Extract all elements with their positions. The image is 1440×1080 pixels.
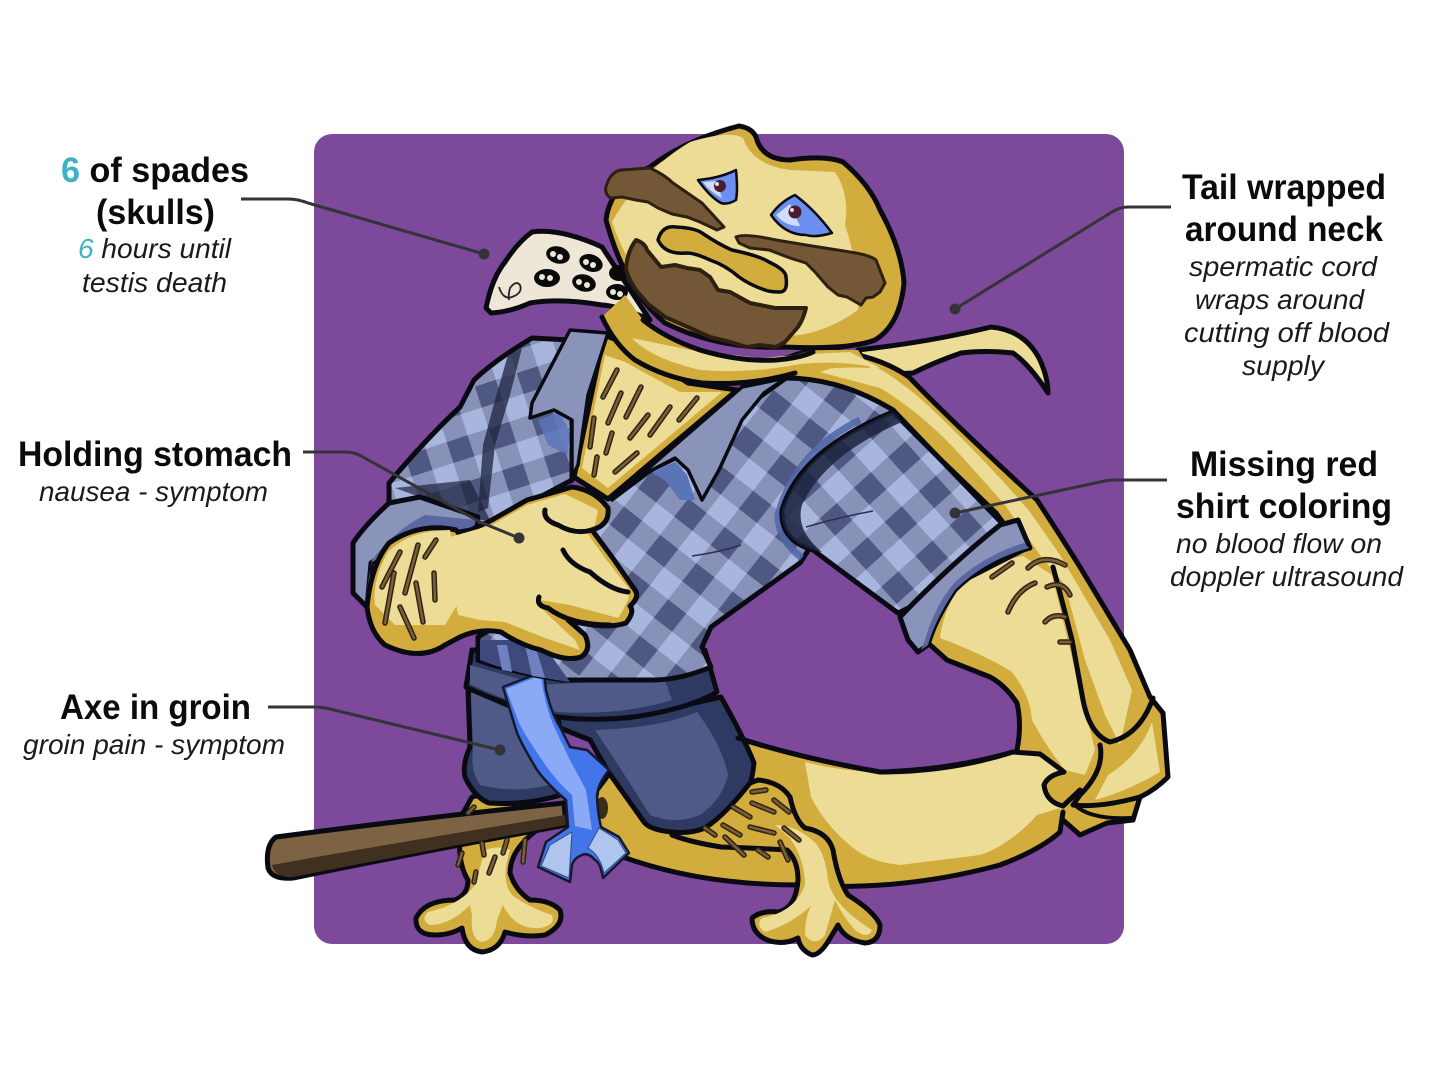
label: tail wrapped around neck: Tail wrapped bbox=[1182, 168, 1386, 207]
left foot and leg bbox=[416, 790, 561, 952]
card skull pips bbox=[534, 244, 629, 300]
stitches on forearm bbox=[992, 560, 1070, 642]
label: 6 of spades: 6 of spades bbox=[61, 151, 249, 190]
leader line: holding stomach bbox=[303, 452, 524, 544]
label: axe in groin: Axe in groin bbox=[60, 688, 251, 727]
axe handle bbox=[267, 803, 566, 878]
wrist hair bbox=[382, 540, 436, 638]
label: missing red shirt coloring bbox=[1170, 445, 1404, 592]
label: axe in groin bbox=[23, 688, 285, 760]
neck wrap of tail bbox=[602, 295, 880, 384]
tail body and right arm bbox=[780, 350, 1168, 835]
left eye bbox=[698, 170, 737, 204]
right shirt cuff bbox=[900, 520, 1030, 652]
right foot and leg bbox=[672, 780, 880, 955]
pants bbox=[464, 650, 754, 832]
right eye bbox=[771, 195, 832, 236]
label: axe in groin: groin pain - symptom bbox=[23, 729, 285, 760]
label: holding stomach: Holding stomach bbox=[18, 435, 292, 474]
leader line: tail wrapped bbox=[950, 207, 1171, 314]
label: missing red shirt coloring: Missing red bbox=[1190, 445, 1378, 484]
right sleeve of shirt bbox=[692, 412, 1027, 613]
lizard character illustration bbox=[267, 126, 1168, 955]
label: tail wrapped around neck: wraps around bbox=[1195, 284, 1365, 315]
plaid shirt torso bbox=[478, 378, 920, 682]
left moustache bbox=[606, 168, 724, 230]
purple background panel bbox=[314, 134, 1124, 944]
label: 6 of spades: 6 hours until bbox=[78, 233, 232, 264]
label: tail wrapped around neck: cutting off blood bbox=[1184, 317, 1390, 348]
label: 6 of spades bbox=[61, 151, 249, 298]
right moustache bbox=[736, 236, 885, 305]
leader line: 6 of spades bbox=[241, 199, 490, 260]
label: tail wrapped around neck bbox=[1182, 168, 1390, 381]
mouth bbox=[658, 227, 786, 292]
label: missing red shirt coloring: doppler ultrasound bbox=[1170, 561, 1404, 592]
leg hair bbox=[458, 790, 799, 882]
label: tail wrapped around neck: around neck bbox=[1185, 210, 1384, 249]
label: holding stomach: nausea - symptom bbox=[39, 476, 268, 507]
tail tip around neck bbox=[858, 327, 1048, 393]
chest hair bbox=[590, 370, 697, 475]
axe head bbox=[503, 671, 629, 882]
pant legs bbox=[464, 690, 754, 832]
label: holding stomach bbox=[18, 435, 292, 507]
left hand holding stomach bbox=[367, 487, 637, 658]
label: missing red shirt coloring: shirt coloring bbox=[1176, 487, 1392, 526]
head bbox=[606, 126, 904, 360]
leader line: axe in groin bbox=[268, 707, 506, 756]
label: 6 of spades: (skulls) bbox=[96, 193, 215, 232]
chest bbox=[574, 335, 737, 499]
left collar flap bbox=[530, 330, 608, 477]
label: tail wrapped around neck: supply bbox=[1242, 350, 1326, 381]
label: tail wrapped around neck: spermatic cord bbox=[1189, 251, 1378, 282]
waistband bbox=[466, 650, 717, 719]
tail knot in fist bbox=[738, 738, 1080, 865]
left shirt cuff bbox=[353, 497, 478, 607]
left shirt sleeve bbox=[389, 338, 572, 530]
playing card: 6 of spades (skulls) bbox=[486, 231, 650, 320]
leader line: missing red bbox=[950, 480, 1167, 518]
right collar flap bbox=[612, 378, 786, 500]
label: missing red shirt coloring: no blood flow on bbox=[1176, 528, 1382, 559]
beard bbox=[626, 240, 806, 347]
label: 6 of spades: testis death bbox=[82, 267, 227, 298]
lower tail bbox=[590, 738, 1066, 886]
